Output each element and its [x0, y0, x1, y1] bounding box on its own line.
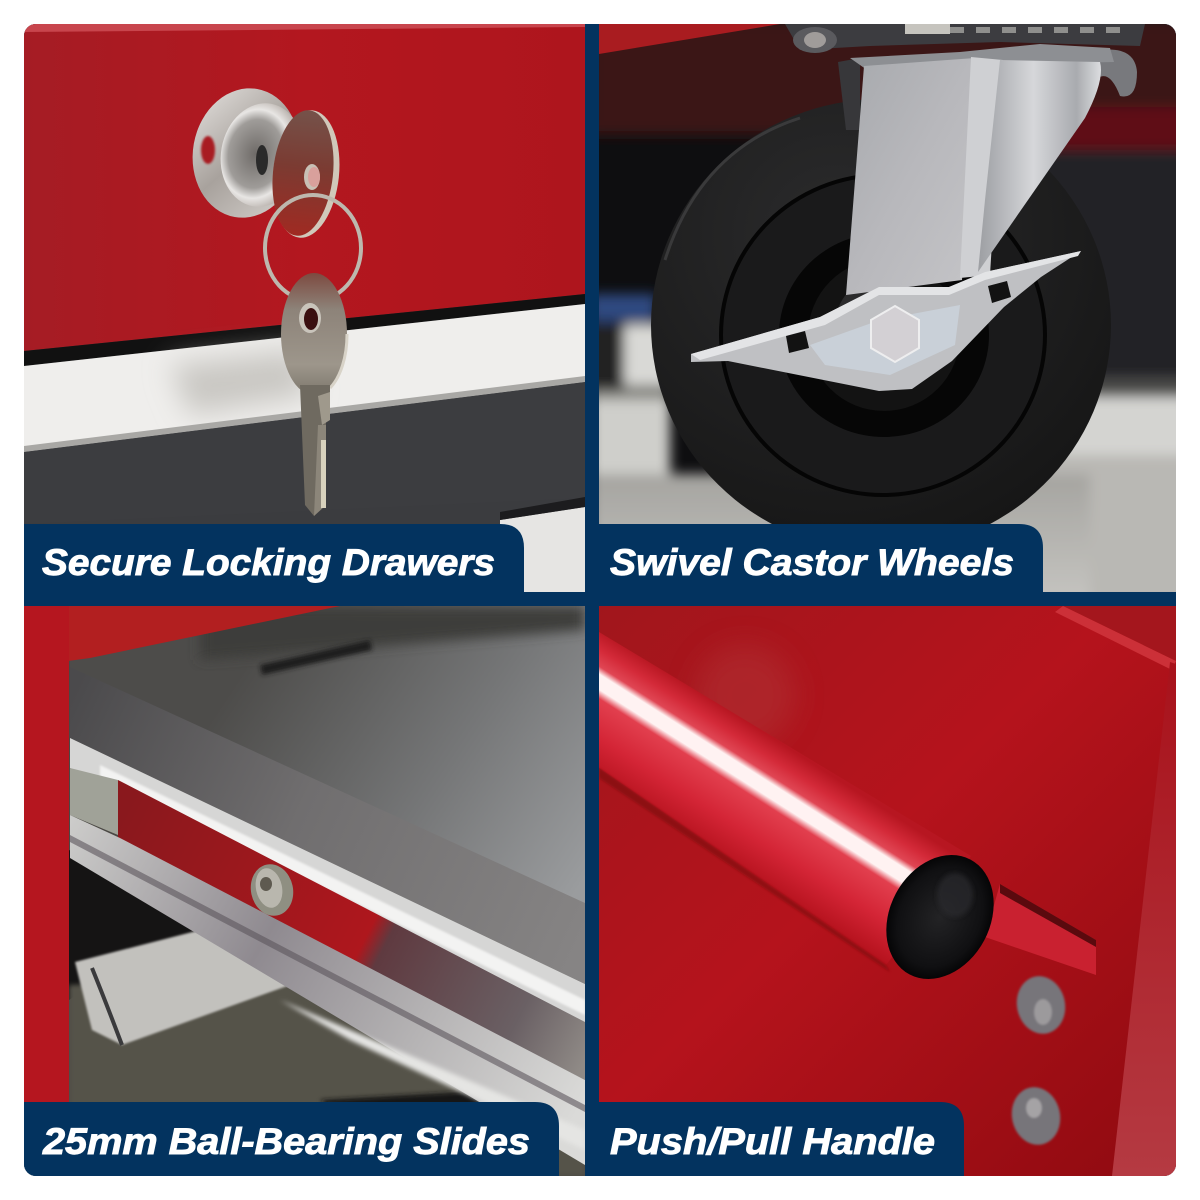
icon: black rubber wheel [651, 99, 1111, 551]
label: Secure Locking Drawers [24, 524, 524, 592]
icon: rivets [1010, 974, 1066, 1146]
icon: castor steel bracket [838, 44, 1137, 295]
lower drawer interior [69, 850, 194, 1000]
label: Swivel Castor Wheels [599, 524, 1043, 592]
panel: push/pull handle photo [599, 606, 1176, 1176]
label: Secure Locking Drawers: Secure Locking Drawers [42, 542, 495, 583]
label: Push/Pull Handle [585, 1102, 964, 1176]
icon: keys and ring [265, 107, 361, 516]
panel: secure locking drawers photo [24, 24, 585, 592]
icon: top hardware and chain [785, 24, 1145, 53]
icon: black end cap [886, 855, 994, 979]
icon: drawer slide rail [70, 667, 585, 1165]
label: 25mm Ball-Bearing Slides [24, 1102, 559, 1176]
label: Swivel Castor Wheels: Swivel Castor Wheels [610, 542, 1014, 583]
label: Push/Pull Handle: Push/Pull Handle [610, 1121, 935, 1162]
icon: bracket slot [985, 884, 1096, 975]
label: 25mm Ball-Bearing Slides: 25mm Ball-Bearing Slides [42, 1121, 530, 1162]
red cabinet upright [24, 606, 69, 1102]
panel: swivel castor wheels photo [590, 20, 1190, 605]
icon: handle tube [599, 632, 1015, 998]
panel: ball-bearing slides photo [24, 606, 585, 1176]
icon: castor brake plate [691, 251, 1081, 391]
icon: lock barrel [192, 88, 293, 218]
